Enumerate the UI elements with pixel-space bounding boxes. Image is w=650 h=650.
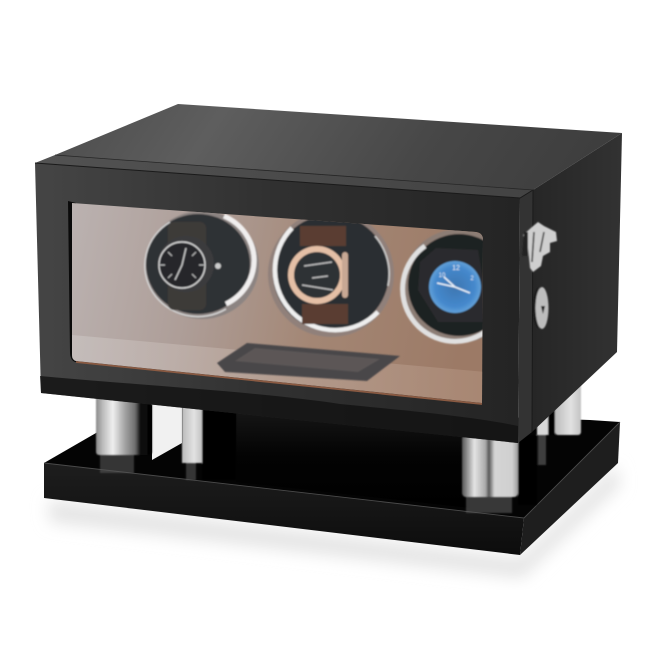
- winder 2: [268, 211, 394, 337]
- white gap behind the left pillars: [152, 400, 182, 460]
- winder 3: 12: [452, 265, 460, 272]
- base front face: [44, 463, 524, 555]
- winder 1: [145, 211, 259, 319]
- seam lines: [35, 163, 533, 432]
- shadow under the cabinet: [236, 405, 470, 508]
- cabinet right side: [532, 133, 622, 432]
- glossy lower band: [40, 376, 518, 443]
- pillar: back left: [182, 400, 236, 480]
- pillar: back right: [537, 370, 581, 465]
- watch case 3: [418, 248, 482, 322]
- watch face 3: [429, 261, 481, 313]
- base highlight edge: [44, 422, 620, 518]
- interior back wall: [72, 203, 483, 403]
- cabinet: [35, 104, 622, 443]
- hasp latch: [522, 222, 557, 272]
- watch face 1: [159, 242, 205, 288]
- winder 3: [399, 230, 483, 345]
- window left lip: [68, 201, 78, 362]
- pillars: [96, 370, 581, 513]
- lid seam strip: [35, 155, 533, 198]
- window: [72, 203, 483, 403]
- pillar: front right: [462, 435, 537, 513]
- cabinet front: [35, 163, 520, 443]
- plinth base: [44, 405, 620, 555]
- floor shadow: [48, 465, 620, 578]
- base top surface: [44, 405, 620, 518]
- watch face 2: [288, 246, 346, 304]
- interior floor: [72, 335, 486, 408]
- base right face: [520, 422, 620, 555]
- door edge: [518, 190, 533, 443]
- cabinet top: [55, 104, 622, 190]
- pillar: front left: [96, 395, 152, 473]
- winder 3: 2: [470, 276, 474, 282]
- window bottom trim: [76, 362, 482, 404]
- tray: [217, 343, 400, 381]
- key lock: [533, 287, 548, 329]
- product photo: watch winder cabinet: [34, 104, 622, 580]
- winder 3: 10: [439, 273, 446, 279]
